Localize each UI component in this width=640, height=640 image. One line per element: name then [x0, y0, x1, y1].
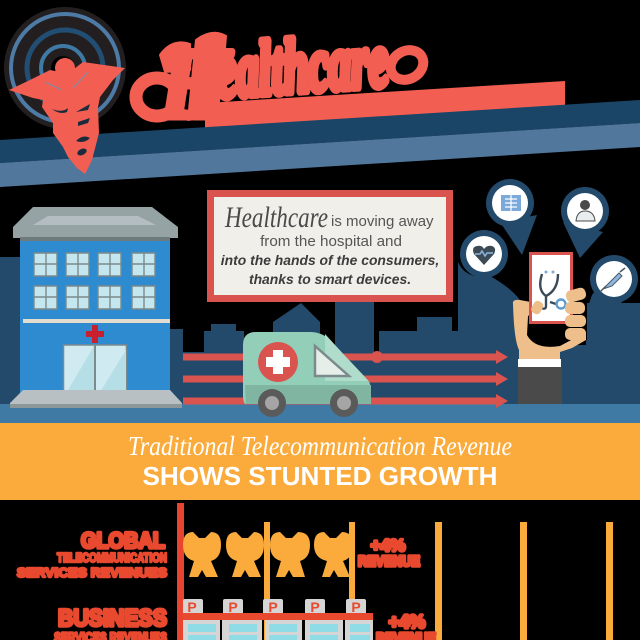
ambulance cross badge [258, 342, 298, 382]
bubble: lungs x-ray [486, 179, 537, 255]
caduceus details [45, 72, 88, 90]
arrows to phone [183, 350, 508, 408]
stethoscope ear tips [544, 270, 554, 274]
title: Healthcare: ealthcare [213, 18, 391, 114]
icon: caduceus [9, 58, 125, 174]
value: first row percent: +4% [371, 536, 405, 555]
caduceus cut-outs [52, 104, 90, 157]
hospital [10, 207, 182, 408]
value: first row label: REVENUE [358, 553, 420, 570]
callout: healthcare moving to smart devices [207, 190, 453, 302]
banner script heading: Traditional Telecommunication Revenue [128, 431, 512, 461]
value: second row [376, 612, 436, 640]
row icons: parking signs and buildings: P [268, 599, 278, 615]
callout: healthcare moving to smart devices: Healthcare [224, 201, 328, 234]
hand holding phone [513, 240, 587, 404]
header ribbon: light band [0, 123, 640, 187]
ambulance [243, 332, 371, 417]
skyline [0, 257, 640, 404]
hospital door [64, 345, 126, 398]
title: Healthcare [136, 18, 429, 139]
callout: healthcare moving to smart devices: into the hands of the consumers, [221, 252, 439, 268]
row label: global telecommunication services revenues: GLOBAL [81, 528, 165, 553]
row label: global telecommunication services revenues [17, 528, 167, 580]
hospital cross [86, 325, 104, 343]
row icons: parking signs and buildings: P [187, 599, 197, 615]
header ribbon: dark band [0, 100, 640, 163]
row icons: parking signs and buildings: P [228, 599, 238, 615]
row icons: orange figures [183, 532, 353, 577]
bubble: syringe [586, 255, 638, 312]
stethoscope icon [540, 274, 566, 309]
callout: healthcare moving to smart devices: from the hospital and [260, 233, 402, 250]
row label: business: BUSINESS [58, 605, 167, 632]
bubble: doctor [561, 187, 609, 258]
ground strip [0, 404, 640, 424]
icon bubbles [460, 179, 638, 312]
row icons: parking signs and buildings: P [351, 599, 361, 615]
subtitle: powered by telecommunications: POWERED BY TELECOMMUNICATIONS [207, 81, 562, 129]
title: Healthcare: H [159, 28, 233, 139]
row label: global telecommunication services revenues: TELECOMMUNICATION [57, 550, 167, 565]
callout: healthcare moving to smart devices: thanks to smart devices. [249, 271, 411, 287]
chart axis and gridlines [177, 503, 613, 640]
ambulance wheels [258, 389, 358, 417]
revenue banner [0, 423, 640, 500]
callout: healthcare moving to smart devices: is moving away [331, 213, 434, 230]
fingers [530, 287, 587, 340]
row label: business [54, 605, 167, 640]
sleeve [518, 367, 562, 404]
banner bold heading: SHOWS STUNTED GROWTH [142, 461, 498, 491]
emblem: concentric rings [4, 7, 126, 129]
bubble: heart [460, 230, 508, 278]
row icons: parking signs and buildings [183, 599, 373, 640]
row icons: parking signs and buildings: P [310, 599, 320, 615]
phone [529, 252, 573, 324]
hospital windows [34, 253, 155, 309]
cuff [518, 359, 561, 367]
value: second row: +4% [389, 612, 425, 632]
row label: global telecommunication services revenues: SERVICES REVENUES [17, 565, 167, 580]
